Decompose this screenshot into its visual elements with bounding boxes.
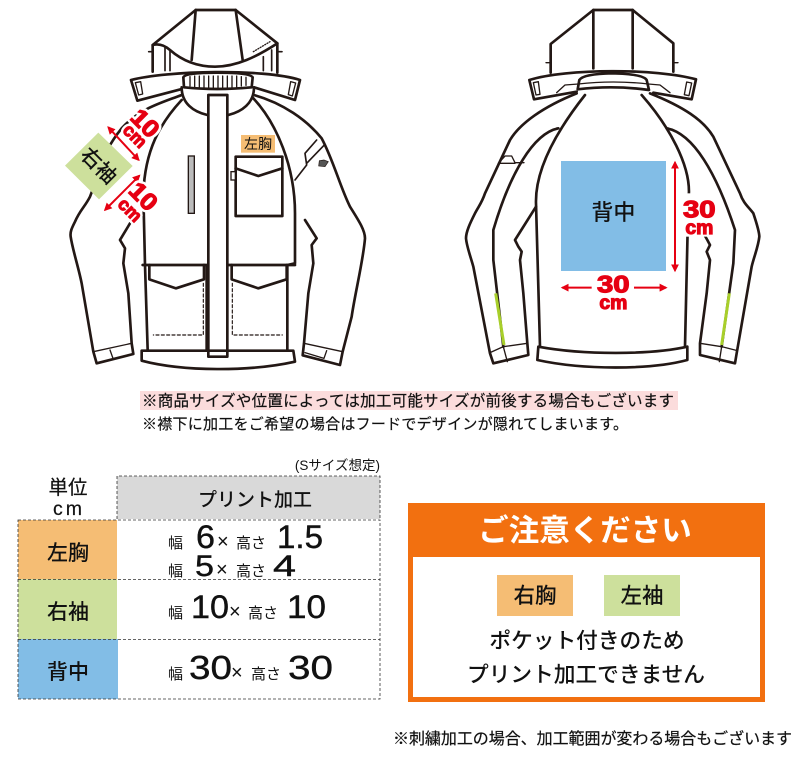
row: back: 30 (189, 649, 232, 686)
row: left chest: × (216, 559, 228, 581)
table header: プリント加工 (198, 489, 312, 511)
row: left chest: 1.5 (277, 519, 323, 555)
row: back (168, 649, 333, 686)
lower 10cm dimension: cm (114, 194, 146, 226)
row: left chest: 5 (195, 550, 214, 583)
back print area (561, 161, 666, 271)
caution panel (408, 503, 765, 702)
row: left chest (168, 519, 323, 583)
upper 10cm dimension: cm (119, 120, 151, 152)
row: left chest: × (217, 531, 229, 553)
back body and sleeves (466, 93, 759, 367)
row: back: 高さ (251, 666, 281, 683)
front body and sleeves (71, 95, 365, 369)
row: right sleeve: 10 (287, 589, 326, 625)
row: left chest: 幅 (168, 535, 183, 552)
tag: left sleeve: 左袖 (620, 584, 664, 608)
row: right sleeve: 10 (191, 589, 229, 625)
row: left chest: 高さ (236, 535, 266, 552)
vertical 30cm dimension: cm (685, 218, 713, 239)
row: back: × (231, 662, 243, 684)
caution message: プリント加工できません (467, 662, 705, 687)
unit label: 単位 (48, 477, 88, 499)
tag: right chest: 右胸 (513, 584, 557, 608)
vertical 30cm dimension: 30 (683, 196, 716, 223)
upper 10cm dimension: 10 (125, 104, 165, 144)
lower 10cm dimension: 10 (123, 177, 163, 217)
front pockets (149, 156, 287, 335)
left chest label: 左胸 (244, 136, 272, 152)
row labels: 左胸 (47, 542, 89, 565)
caution message: ポケット付きのため (489, 628, 685, 653)
tag: right chest (497, 575, 573, 616)
right sleeve label (65, 133, 133, 199)
vertical 30cm dimension (675, 162, 717, 271)
caution heading: ご注意ください (478, 513, 692, 548)
row labels: 背中 (47, 661, 89, 684)
lower 10cm dimension: 10 (123, 177, 163, 217)
upper 10cm dimension: 10 (125, 104, 165, 144)
horizontal 30cm dimension (562, 272, 666, 314)
caution message (467, 628, 705, 687)
upper 10cm dimension (108, 104, 165, 160)
row: back: 幅 (168, 666, 183, 683)
horizontal 30cm dimension: 30 (597, 272, 630, 299)
row: right sleeve: × (229, 601, 241, 623)
row: left chest: 幅 (168, 563, 183, 580)
note: hood covers design: ※襟下に加工をご希望の場合はフードでデザインが隠れてしまいます。 (142, 415, 628, 433)
unit label: cm (53, 498, 85, 520)
row: back: 30 (288, 649, 333, 686)
back print area: 背中 (591, 200, 635, 225)
tag: left sleeve (604, 575, 680, 616)
row: left chest: 4 (273, 550, 296, 583)
unit label (48, 477, 88, 520)
back hood (529, 10, 696, 99)
note: embroidery: ※刺繍加工の場合、加工範囲が変わる場合もございます (393, 729, 792, 748)
row: left chest: 6 (196, 519, 215, 555)
horizontal 30cm dimension: cm (599, 293, 627, 314)
back jacket illustration (466, 10, 759, 367)
lower 10cm dimension (105, 176, 163, 226)
upper 10cm dimension: cm (119, 120, 151, 152)
table header (117, 476, 380, 519)
table size assumption: (Sサイズ想定) (295, 458, 380, 473)
row: left chest: 高さ (236, 563, 266, 580)
front hood (131, 10, 300, 115)
lower 10cm dimension: cm (114, 194, 146, 226)
row labels: 右袖 (47, 601, 89, 624)
front jacket illustration (65, 10, 365, 369)
note: size variation: ※商品サイズや位置によっては加工可能サイズが前後する場合もございます (142, 391, 674, 410)
row labels (18, 520, 380, 699)
size table (18, 458, 380, 699)
right sleeve label: 右袖 (76, 143, 121, 189)
row: right sleeve: 幅 (168, 605, 183, 622)
row: right sleeve (168, 589, 326, 625)
row: right sleeve: 高さ (248, 605, 278, 622)
